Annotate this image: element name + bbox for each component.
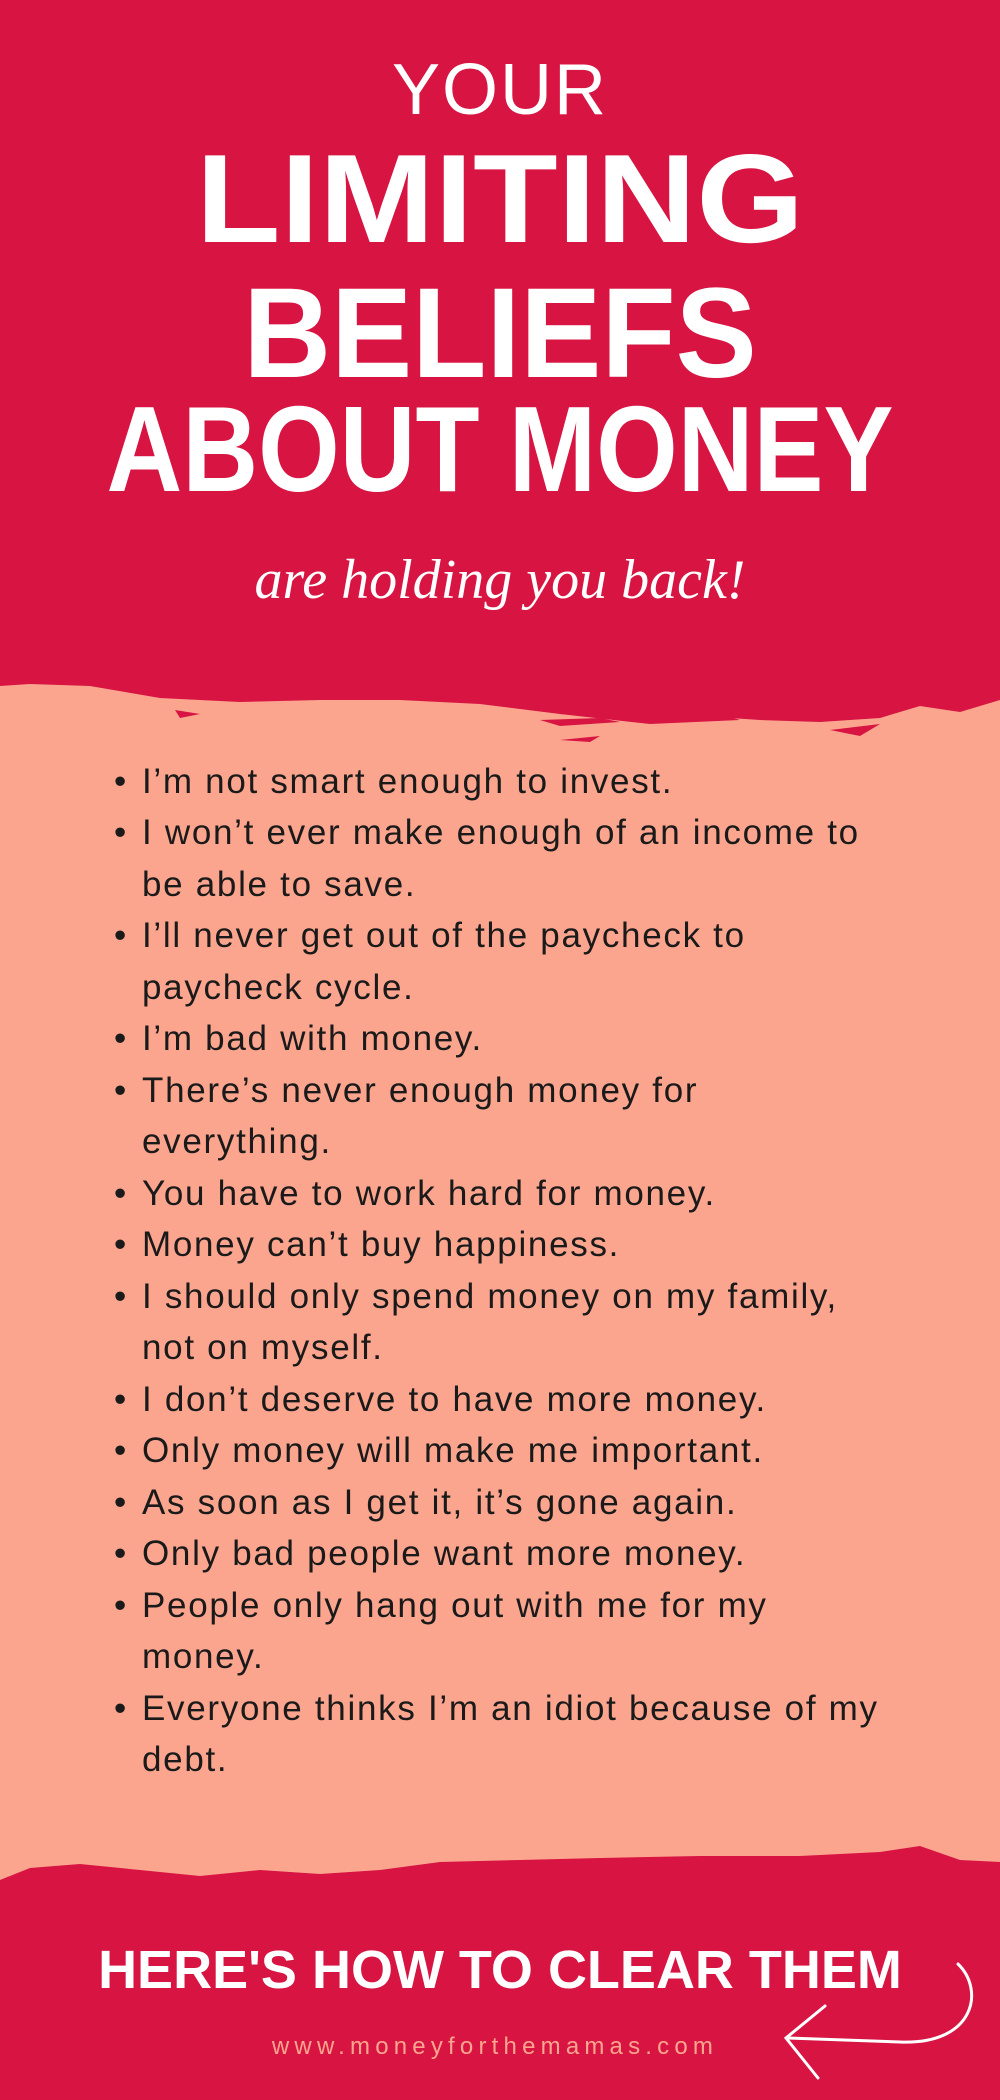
list of limiting beliefs: Only money will make me important. (142, 1431, 764, 1470)
list of limiting beliefs: • (114, 1174, 128, 1213)
list of limiting beliefs: • (114, 1586, 128, 1625)
list of limiting beliefs: debt. (142, 1740, 228, 1779)
list of limiting beliefs: • (114, 1534, 128, 1573)
list of limiting beliefs: everything. (142, 1122, 332, 1161)
list of limiting beliefs: There’s never enough money for (142, 1071, 698, 1110)
title: BELIEFS: BELIEFS (243, 262, 757, 405)
list of limiting beliefs: be able to save. (142, 865, 416, 904)
list of limiting beliefs: I won’t ever make enough of an income to (142, 813, 860, 852)
list of limiting beliefs: • (114, 1380, 128, 1419)
list of limiting beliefs: Money can’t buy happiness. (142, 1225, 620, 1264)
list of limiting beliefs: paycheck cycle. (142, 968, 415, 1007)
list of limiting beliefs: I’ll never get out of the paycheck to (142, 916, 746, 955)
footer heading: HERE'S HOW TO CLEAR THEM (98, 1940, 902, 2000)
list of limiting beliefs: • (114, 1019, 128, 1058)
website url: www.moneyforthemamas.com (272, 2033, 718, 2060)
list of limiting beliefs: You have to work hard for money. (142, 1174, 716, 1213)
subtitle script: are holding you back! (255, 549, 745, 611)
list of limiting beliefs: • (114, 1071, 128, 1110)
list of limiting beliefs (114, 762, 879, 1779)
list of limiting beliefs: Everyone thinks I’m an idiot because of my (142, 1689, 879, 1728)
list of limiting beliefs: I don’t deserve to have more money. (142, 1380, 767, 1419)
list of limiting beliefs: money. (142, 1637, 264, 1676)
title: YOUR: YOUR (392, 50, 608, 130)
list of limiting beliefs: • (114, 1225, 128, 1264)
list of limiting beliefs: • (114, 1689, 128, 1728)
list of limiting beliefs: As soon as I get it, it’s gone again. (142, 1483, 737, 1522)
list of limiting beliefs: • (114, 813, 128, 852)
list of limiting beliefs: • (114, 916, 128, 955)
list of limiting beliefs: • (114, 762, 128, 801)
list of limiting beliefs: I’m bad with money. (142, 1019, 483, 1058)
list of limiting beliefs: • (114, 1483, 128, 1522)
list of limiting beliefs: Only bad people want more money. (142, 1534, 746, 1573)
title: LIMITING: LIMITING (196, 128, 804, 269)
list of limiting beliefs: • (114, 1431, 128, 1470)
list of limiting beliefs: • (114, 1277, 128, 1316)
list of limiting beliefs: People only hang out with me for my (142, 1586, 768, 1625)
list of limiting beliefs: I should only spend money on my family, (142, 1277, 838, 1316)
list of limiting beliefs: I’m not smart enough to invest. (142, 762, 673, 801)
icon: curved arrow (784, 1962, 974, 2080)
list of limiting beliefs: not on myself. (142, 1328, 384, 1367)
title: ABOUT MONEY: ABOUT MONEY (107, 381, 893, 517)
